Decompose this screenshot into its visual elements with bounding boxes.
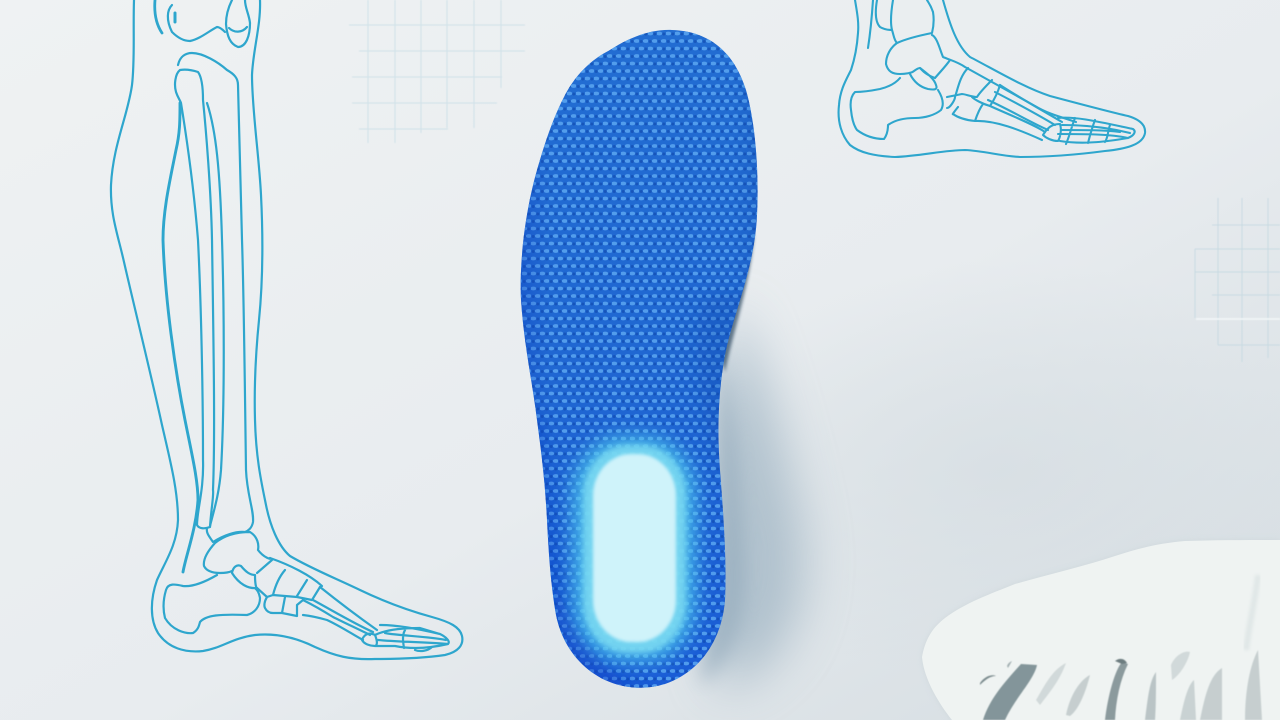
sneaker seam (1246, 575, 1258, 650)
talus (204, 532, 270, 573)
sneaker sole creases (980, 650, 1262, 720)
ankle bones (868, 0, 1076, 122)
fibula (175, 70, 214, 528)
toe bones (1043, 118, 1135, 144)
insole body (520, 30, 758, 688)
foot outline (839, 0, 1145, 157)
leg and foot outline (111, 0, 462, 659)
insole drop shadow (700, 235, 804, 690)
calcaneus (164, 575, 260, 633)
decorative grid: top centre (349, 0, 525, 143)
arch shading (696, 290, 745, 470)
heel dark rim (530, 420, 640, 692)
midfoot bones (910, 60, 1042, 140)
knee joint bones (155, 0, 162, 33)
glowing heel pad (593, 454, 676, 642)
sneaker toe (922, 540, 1280, 720)
top right foot skeleton line drawing (839, 0, 1145, 157)
tibia (178, 53, 253, 542)
calcaneus (851, 78, 943, 139)
toe bones (362, 625, 449, 651)
thick posterior bone line (163, 103, 198, 572)
midfoot bones (232, 565, 257, 588)
insole (520, 30, 758, 688)
glow halo (572, 436, 696, 662)
decorative grid: right side (1195, 198, 1280, 362)
leg skeleton line drawing (111, 0, 462, 659)
